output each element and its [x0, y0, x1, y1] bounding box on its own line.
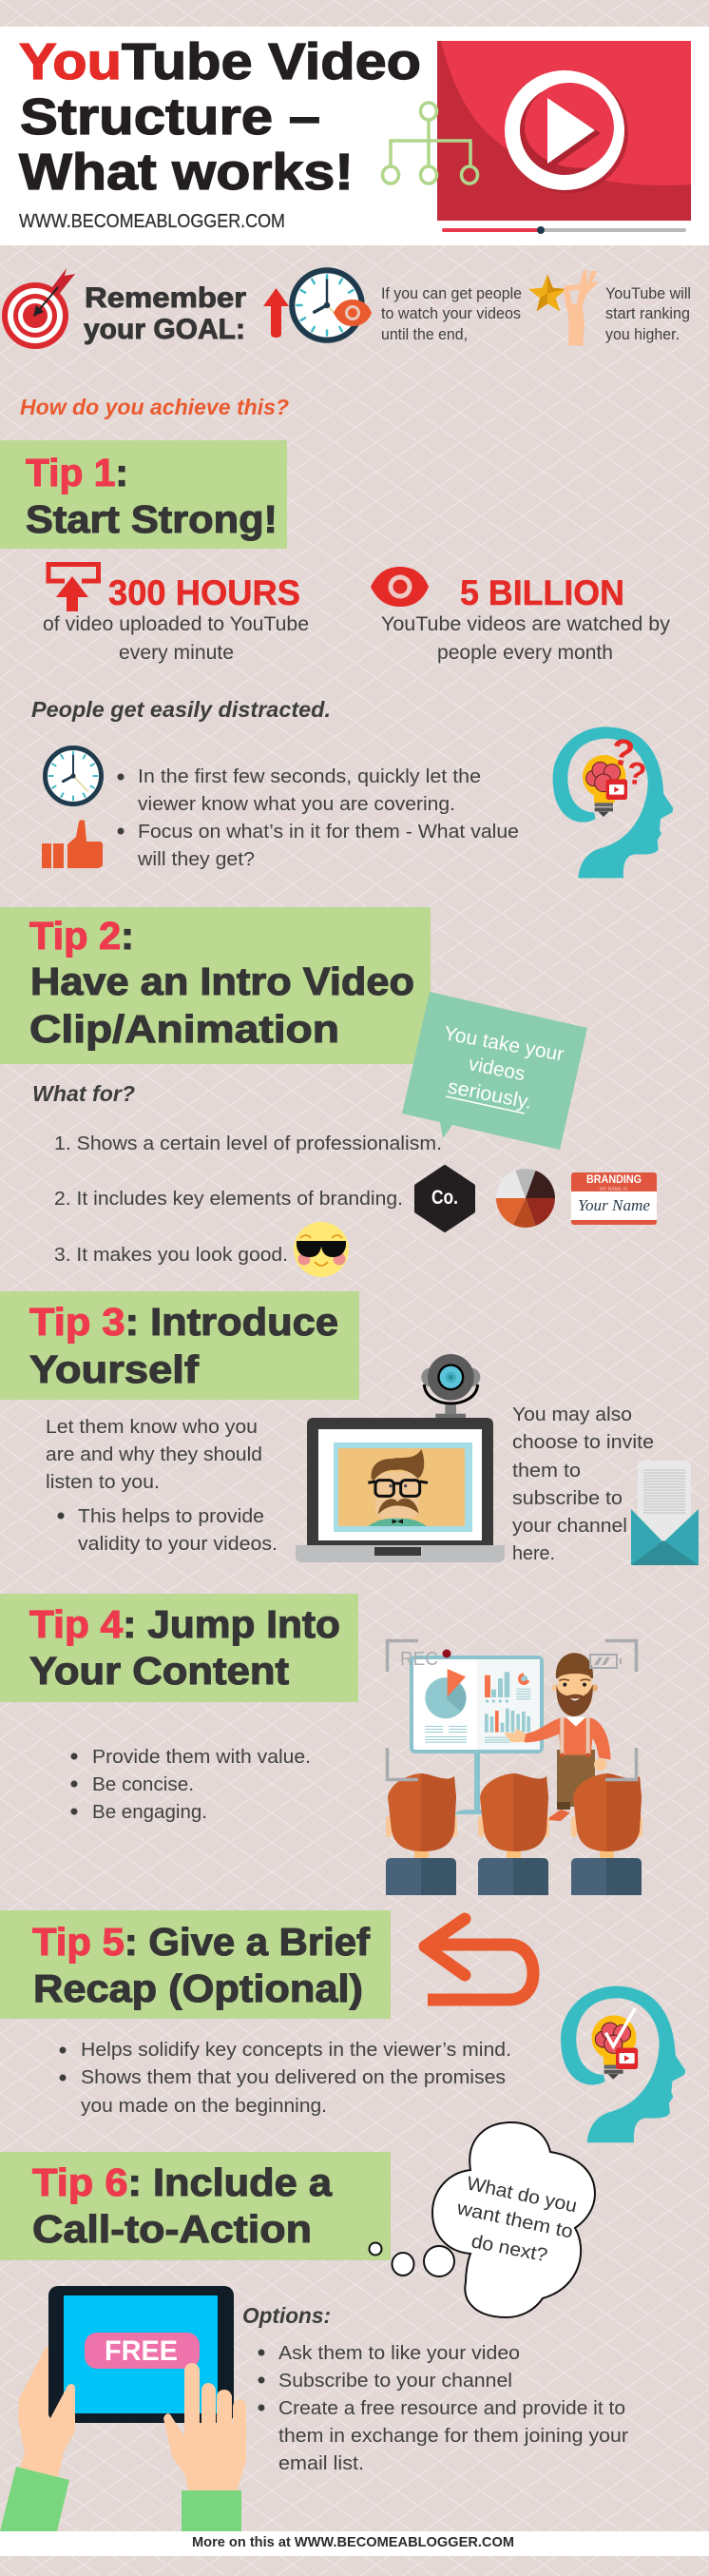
callout: you take your videos seriously: videos [467, 1053, 527, 1085]
bullet list: tip 4: Be engaging. [92, 1802, 207, 1823]
callout: you take your videos seriously: You take your [442, 1022, 565, 1066]
callout: you take your videos seriously: seriously. [446, 1075, 534, 1114]
icon: head with lightbulb and question marks: ? [624, 756, 648, 793]
title: Structure – [20, 88, 320, 145]
stat: 5 billion: people every month [437, 641, 613, 664]
text: youtube ranks higher: you higher. [605, 326, 680, 343]
callout: thought cloud [369, 2122, 595, 2317]
icon: branding name tag [571, 1172, 657, 1225]
text: invite to subscribe: here. [512, 1543, 555, 1564]
footer band [0, 2531, 709, 2556]
icon: branding name tag: BRANDING [586, 1172, 642, 1186]
rec label: REC [400, 1649, 438, 1670]
illustration: presenter and audience [386, 1641, 642, 1895]
bullet list: tip 4: Be concise. [92, 1774, 194, 1795]
numbered list: tip 2: 2. It includes key elements of branding. [54, 1189, 403, 1210]
text: let them know who you are: validity to your videos. [78, 1534, 278, 1555]
icon: co. hexagon logo: Co. [431, 1187, 458, 1209]
tablet [48, 2286, 234, 2423]
bullet list: tip 1: Focus on what’s in it for them - What value [138, 822, 519, 843]
header band [0, 27, 709, 245]
stat: 300 hours: every minute [119, 641, 234, 664]
subheading: what for: What for? [32, 1081, 135, 1106]
stat: 5 billion: 5 BILLION [460, 573, 624, 612]
video player illustration [437, 41, 691, 234]
panel: tip 5 heading [0, 1910, 391, 2019]
text: let them know who you are: are and why they should [46, 1444, 262, 1465]
panel: tip 2 heading [0, 907, 431, 1064]
icon: green structure tree [382, 103, 477, 184]
icon: colour palette pie [496, 1169, 555, 1228]
icon: head with lightbulb and check mark [561, 1986, 685, 2142]
tablet: FREE [105, 2335, 178, 2367]
panel: tip 3 heading [0, 1291, 359, 1400]
panel: tip 6 heading: Call-to-Action [32, 2207, 312, 2251]
heading: remember your goal: your GOAL: [84, 314, 245, 345]
text: youtube ranks higher: start ranking [605, 305, 690, 322]
icon: hand holding star [528, 270, 599, 345]
text: watch to the end [381, 285, 522, 343]
panel: tip 1 heading: Tip 1: [26, 451, 128, 494]
bullet list: tip 1 [118, 766, 519, 870]
numbered list: tip 2: 3. It makes you look good. [54, 1245, 288, 1266]
text: youtube ranks higher [605, 285, 691, 343]
bullet list: tip 5 [59, 2040, 511, 2117]
presentation board [412, 1657, 542, 1752]
stat: 5 billion [371, 567, 670, 664]
bullet list: tip 5: Shows them that you delivered on the promises [81, 2067, 506, 2088]
stat: 300 hours [43, 565, 309, 664]
text: watch to the end: If you can get people [381, 285, 522, 302]
icon: head with lightbulb and question marks: ? [608, 730, 637, 775]
text: invite to subscribe: choose to invite [512, 1432, 654, 1453]
icon: smiley with sunglasses [294, 1222, 349, 1277]
text: invite to subscribe: them to [512, 1461, 581, 1482]
bullet list: tip 6: Subscribe to your channel [278, 2371, 512, 2392]
panel: tip 3 heading: Tip 3: Introduce [29, 1300, 338, 1344]
presenter man [504, 1653, 611, 1821]
panel: tip 5 heading: Recap (Optional) [33, 1966, 363, 2010]
panel: tip 4 heading [0, 1594, 358, 1702]
callout: thought cloud: What do you [465, 2173, 579, 2217]
left hand [0, 2347, 75, 2531]
icon: upload [48, 565, 99, 611]
callout: thought cloud: do next? [469, 2231, 549, 2266]
subheading: options: Options: [242, 2303, 331, 2328]
icon: target [2, 268, 75, 349]
callout: thought cloud: want them to [454, 2198, 575, 2243]
stat: 300 hours: 300 HOURS [108, 573, 300, 612]
goal row [2, 268, 691, 349]
bullet list: tip 6 [259, 2343, 628, 2474]
panel: tip 4 heading: Your Content [29, 1649, 289, 1693]
illustration: webcam [421, 1354, 480, 1419]
panel: tip 1 heading [0, 440, 287, 549]
panel: tip 2 heading: Tip 2: [29, 914, 134, 958]
panel: tip 6 heading: Tip 6: Include a [32, 2160, 333, 2204]
heading: remember your goal: Remember [85, 282, 246, 314]
bullet list: tip 5: Helps solidify key concepts in the viewer’s mind. [81, 2040, 511, 2061]
icon: branding name tag: Your Name [578, 1196, 650, 1214]
bullet list: tip 5: you made on the beginning. [81, 2096, 327, 2117]
title: YouTube Video [19, 33, 421, 90]
panel: tip 1 heading: Start Strong! [26, 497, 278, 541]
icon: return arrow [425, 1919, 533, 2000]
bullet list: tip 1: will they get? [137, 849, 255, 870]
question: how do you achieve this: How do you achieve this? [20, 395, 289, 419]
icon: thumbs up [42, 820, 103, 868]
camera frame overlay [388, 1641, 637, 1780]
icon: hipster character [368, 1449, 428, 1526]
panel: tip 5 heading: Tip 5: Give a Brief [32, 1920, 370, 1964]
text: let them know who you are: Let them know who you [46, 1417, 258, 1438]
callout: you take your videos seriously [402, 992, 587, 1150]
bullet list: tip 4: Provide them with value. [92, 1747, 311, 1768]
panel: tip 4 heading: Tip 4: Jump Into [29, 1602, 340, 1646]
illustration: hands on tablet [0, 2286, 246, 2531]
icon: clock [45, 747, 102, 804]
title: What works! [19, 144, 354, 201]
bullet list: tip 6: Create a free resource and provide it to [278, 2398, 625, 2419]
numbered list: tip 2: 1. Shows a certain level of professionalism. [54, 1133, 442, 1154]
footer band: More on this at WWW.BECOMEABLOGGER.COM [192, 2534, 514, 2550]
text: youtube ranks higher: YouTube will [605, 285, 691, 302]
bullet list: tip 6: Ask them to like your video [278, 2343, 520, 2364]
text: let them know who you are [46, 1417, 278, 1555]
text: let them know who you are: listen to you. [46, 1472, 160, 1493]
stat: 5 billion: YouTube videos are watched by [381, 612, 670, 635]
text: invite to subscribe: your channel [512, 1516, 627, 1537]
icon: up arrow [263, 288, 289, 338]
icon: co. hexagon logo [416, 1167, 473, 1230]
icon: clock with eye [292, 270, 372, 340]
panel: tip 3 heading: Yourself [29, 1347, 199, 1391]
panel: tip 2 heading: Have an Intro Video [30, 959, 414, 1003]
text: invite to subscribe: You may also [512, 1404, 632, 1425]
subheading: people get easily distracted: People get easily distracted. [31, 697, 331, 722]
panel: tip 6 heading [0, 2152, 391, 2260]
bullet list: tip 1: In the first few seconds, quickly let the [138, 766, 481, 787]
stat: 300 hours: of video uploaded to YouTube [43, 612, 309, 635]
icon: branding name tag: MY NAME IS [600, 1187, 628, 1192]
website url: WWW.BECOMEABLOGGER.COM [19, 211, 285, 232]
icon: head with lightbulb and question marks [553, 726, 673, 878]
audience members [386, 1773, 642, 1895]
text: let them know who you are: This helps to provide [78, 1506, 264, 1527]
text: invite to subscribe [512, 1404, 654, 1564]
icon: eye [371, 567, 429, 607]
bullet list: tip 6: email list. [278, 2453, 364, 2474]
heading: remember your goal [84, 282, 246, 345]
bullet list: tip 1: viewer know what you are covering. [138, 794, 455, 815]
panel: tip 2 heading: Clip/Animation [29, 1007, 339, 1051]
text: invite to subscribe: subscribe to [512, 1488, 623, 1509]
illustration: laptop with presenter [296, 1418, 505, 1562]
title [19, 33, 421, 201]
text: watch to the end: to watch your videos [381, 305, 521, 322]
right hand [163, 2363, 246, 2531]
chart board stand [454, 1752, 504, 1814]
text: watch to the end: until the end, [381, 326, 468, 343]
bullet list: tip 4 [70, 1747, 311, 1823]
bullet list: tip 6: them in exchange for them joining your [278, 2426, 628, 2447]
icon: envelope with letter [631, 1461, 699, 1565]
numbered list: tip 2 [54, 1133, 442, 1266]
